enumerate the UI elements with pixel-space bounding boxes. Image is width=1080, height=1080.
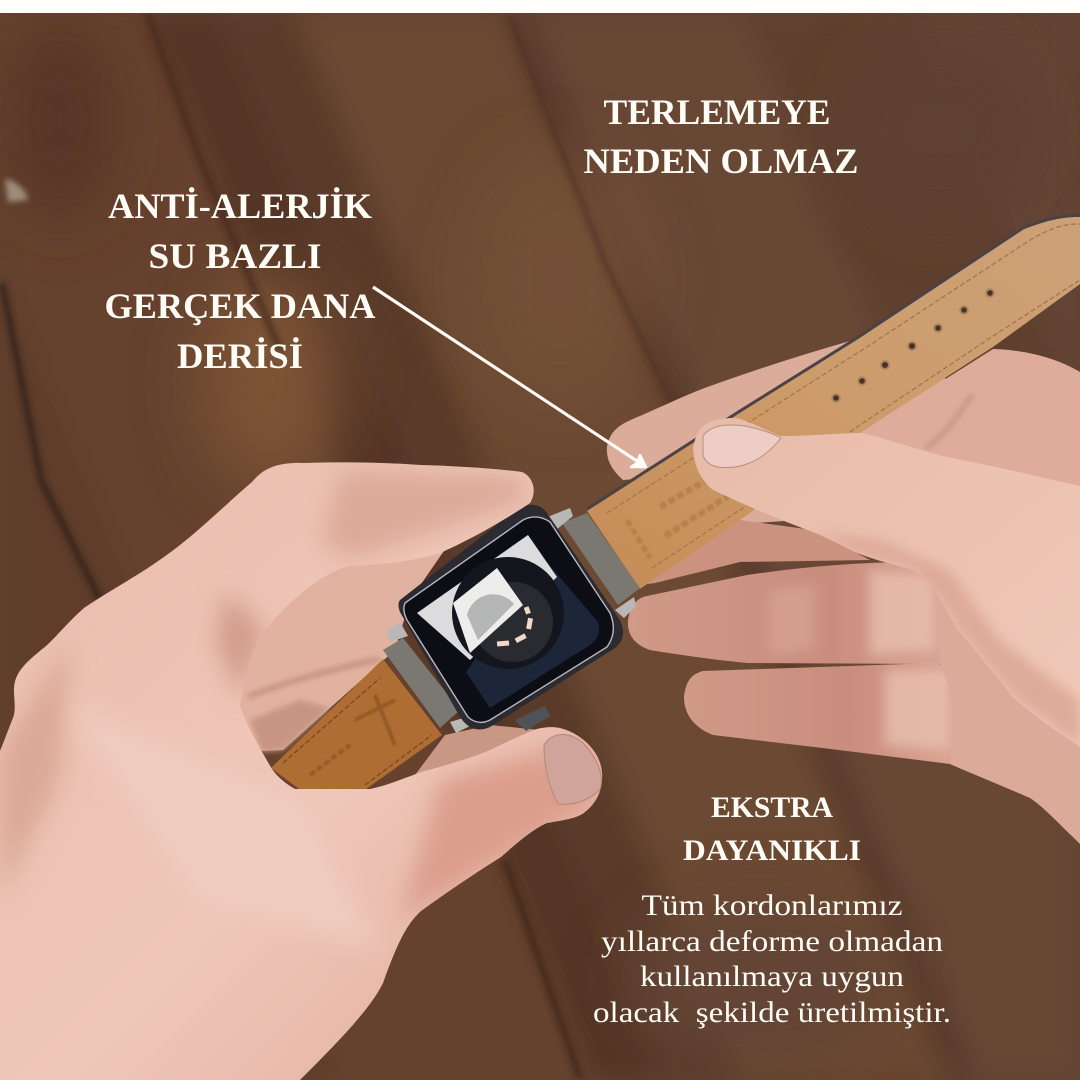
knuckle highlights: [770, 570, 950, 750]
leather strap upper: [587, 215, 1080, 589]
watch case: [398, 505, 623, 729]
embossed logo: [310, 695, 395, 775]
heading: leather: SU BAZLI: [148, 236, 322, 276]
heading: leather: DERİSİ: [177, 336, 303, 376]
heading: sweat: [584, 92, 858, 181]
sensor reflection: [453, 568, 523, 653]
finger shadow beside strap: [250, 700, 330, 752]
left hand: rear fingers: [235, 548, 446, 751]
finger crease: [248, 659, 379, 697]
heading: durable: [683, 791, 861, 867]
strap holes: [832, 289, 994, 402]
heading: durable: EKSTRA: [711, 791, 833, 824]
body text: durable: yıllarca deforme olmadan: [601, 925, 943, 958]
thumb nail: [703, 425, 781, 468]
thumb shading: [813, 532, 1080, 747]
engraved light label: [417, 535, 557, 660]
blue reflection: [466, 560, 599, 708]
left hand: [0, 462, 602, 1080]
hand shadow folds: [0, 470, 600, 950]
body text: durable: Tüm kordonlarımız: [642, 889, 902, 922]
pinky finger: [684, 663, 965, 770]
middle finger under strap: [640, 520, 870, 585]
sensor disc: [452, 557, 564, 669]
thumbnail: [544, 734, 601, 804]
body text: durable: [593, 889, 951, 1029]
back of palm above strap: [863, 349, 1080, 490]
right thumb: [693, 418, 1080, 747]
index finger behind strap: [607, 341, 1000, 524]
grey leather lug lower: [383, 638, 460, 728]
heading: leather: ANTİ-ALERJİK: [108, 186, 372, 226]
heading: leather: GERÇEK DANA: [104, 286, 376, 326]
right hand: rear fingers: [607, 341, 1080, 844]
heading: sweat: NEDEN OLMAZ: [584, 141, 858, 181]
embossed brand marks: [627, 478, 730, 558]
crown: [515, 706, 550, 731]
case edge ring: [404, 517, 613, 722]
heading: durable: DAYANIKLI: [683, 834, 861, 867]
lower strap stitching: [283, 678, 432, 785]
watch lugs: [386, 508, 636, 733]
body text: durable: olacak şekilde üretilmiştir.: [593, 996, 951, 1029]
body text: durable: kullanılmaya uygun: [640, 960, 904, 993]
heading: leather: [104, 186, 376, 376]
strap dark edge: [587, 215, 1080, 509]
stitching: [607, 224, 1080, 568]
white strip at top edge: [0, 0, 1080, 13]
arrow pointing to leather: [373, 287, 646, 467]
finger below lower strap: [415, 725, 540, 775]
watch: [386, 505, 636, 733]
heading: sweat: TERLEMEYE: [604, 92, 830, 132]
sensor charging marks: [497, 606, 533, 647]
watch lower strap: [271, 638, 460, 789]
grey leather lug upper: [562, 513, 640, 605]
ring finger: [628, 562, 965, 664]
palm crease: [925, 394, 973, 448]
lower palm: [935, 590, 1080, 844]
sensor grey disc: [467, 594, 514, 640]
